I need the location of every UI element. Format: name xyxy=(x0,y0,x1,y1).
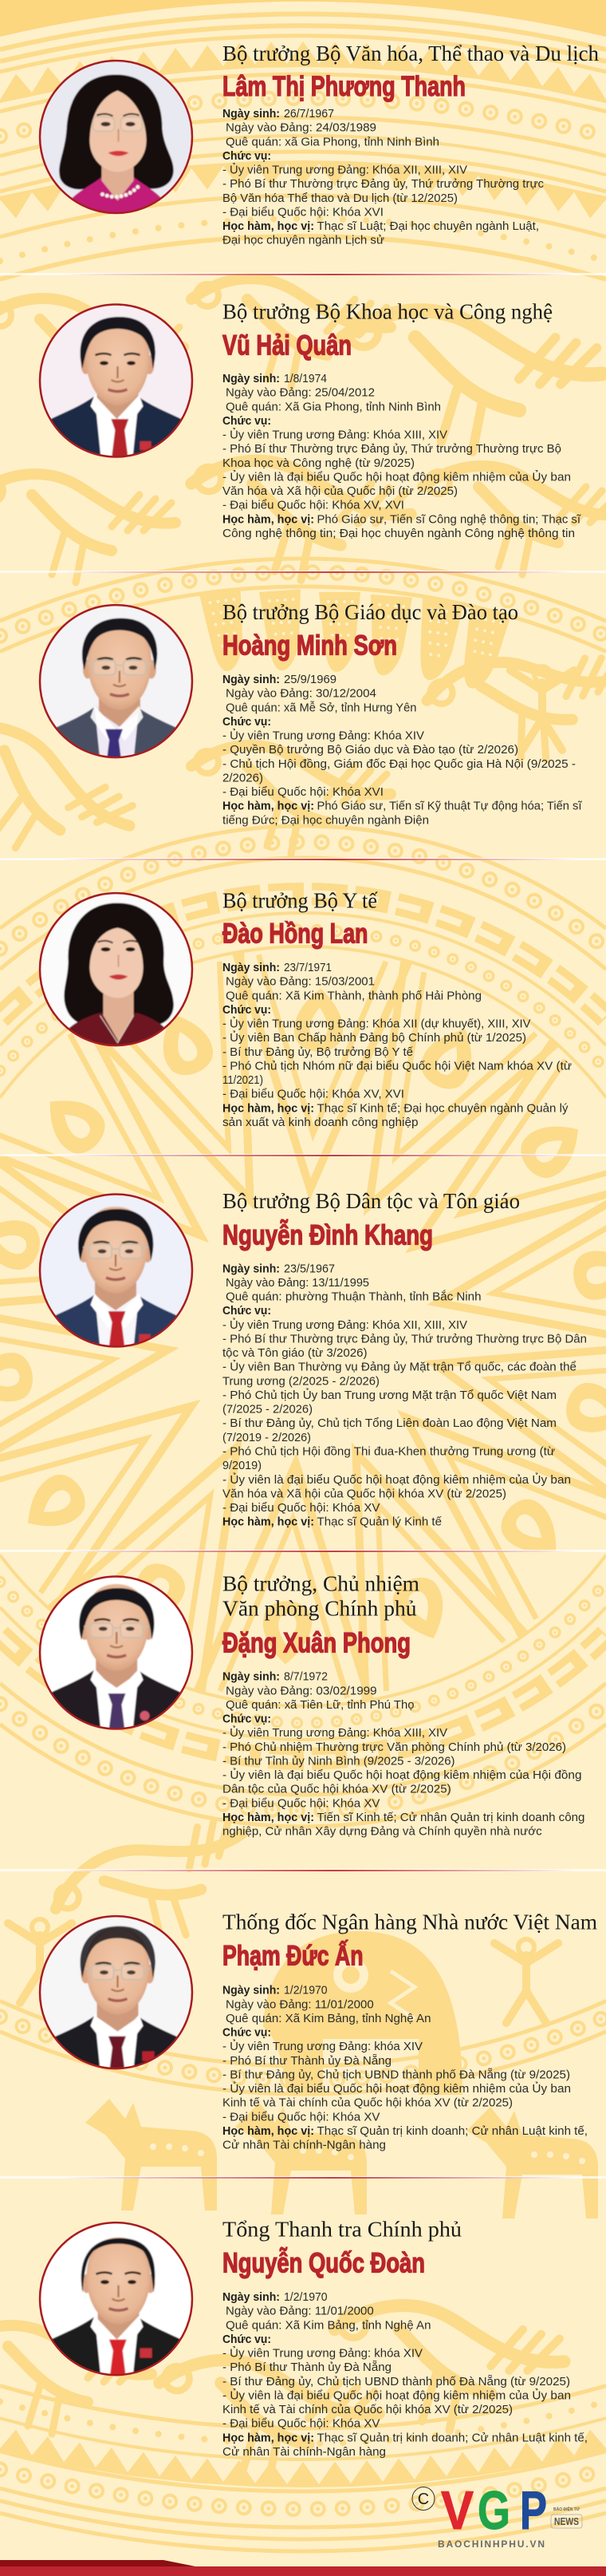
biography text: Ngày vào Đảng: 25/04/2012 xyxy=(226,386,375,400)
portrait xyxy=(37,57,196,217)
name: Đào Hồng Lan xyxy=(222,919,368,950)
biography text: 9/2019) xyxy=(222,1459,262,1472)
biography text: - Ủy viên Trung ương Đảng: Khóa XIII, XIV xyxy=(222,1725,447,1740)
biography text: tiếng Đức; Đại học chuyên ngành Điện xyxy=(222,813,429,827)
biography text: - Phó Bí thư Thành ủy Đà Nẵng xyxy=(222,2054,392,2068)
biography text: Học hàm, học vị: xyxy=(222,1811,314,1824)
biography text: Kinh tế và Tài chính của Quốc hội khóa XV (từ 2/2025) xyxy=(222,2403,513,2416)
biography text: Học hàm, học vị: xyxy=(222,219,314,233)
biography text: - Ủy viên là đại biểu Quốc hội hoạt động kiêm nhiệm của Ủy ban xyxy=(222,1472,571,1487)
biography text: Ngày sinh: xyxy=(222,2290,280,2304)
biography text: Cử nhân Tài chính-Ngân hàng xyxy=(222,2139,386,2152)
biography text: Ngày sinh: xyxy=(222,1262,280,1275)
biography text: Quê quán: phường Thuận Thành, tỉnh Bắc Ninh xyxy=(226,1290,482,1304)
biography text: Trung ương (2/2025 - 2/2026) xyxy=(222,1374,380,1388)
biography text: - Ủy viên Trung ương Đảng: Khóa XIV xyxy=(222,728,424,742)
portrait xyxy=(38,2222,193,2376)
biography text: 23/5/1967 xyxy=(284,1262,335,1275)
biography text: Ngày sinh: xyxy=(222,372,280,385)
biography text xyxy=(222,961,572,1129)
role heading: Bộ trưởng Bộ Dân tộc và Tôn giáo xyxy=(222,1189,520,1213)
name: Vũ Hải Quân xyxy=(222,330,352,361)
biography text: Thạc sĩ Quản trị kinh doanh; Cử nhân Luật kinh tế, xyxy=(317,2431,588,2444)
panel: Lâm Thị Phương Thanh xyxy=(37,41,599,247)
portrait xyxy=(38,1575,193,1730)
biography text: - Ủy viên là đại biểu Quốc hội hoạt động kiêm nhiệm của Ủy ban xyxy=(222,2081,571,2096)
biography text: Học hàm, học vị: xyxy=(222,1101,314,1115)
name: Nguyễn Quốc Đoàn xyxy=(222,2246,425,2278)
name: Phạm Đức Ấn xyxy=(222,1940,364,1972)
portrait xyxy=(38,1193,193,1348)
news badge: BÁO ĐIỆN TỬ xyxy=(553,2506,580,2512)
VGP wordmark: P xyxy=(520,2480,547,2541)
biography text: Văn hóa và Xã hội của Quốc hội khóa XV (từ 2/2025) xyxy=(222,1487,506,1500)
biography text: (7/2025 - 2/2026) xyxy=(222,1403,313,1416)
biography text: Cử nhân Tài chính-Ngân hàng xyxy=(222,2445,386,2459)
biography text: - Bí thư Đảng ủy, Chủ tịch UBND thành phố Đà Nẵng (từ 9/2025) xyxy=(222,2375,570,2388)
portrait xyxy=(38,303,193,458)
biography text: Phó Giáo sư, Tiến sĩ Công nghệ thông tin; Thạc sĩ xyxy=(317,512,581,526)
biography text: sản xuất và kinh doanh công nghiệp xyxy=(222,1116,418,1129)
biography text: - Ủy viên Ban Thường vụ Đảng ủy Mặt trận Tổ quốc, các đoàn thể xyxy=(222,1360,576,1374)
biography text: - Ủy viên là đại biểu Quốc hội hoạt động kiêm nhiệm của Ủy ban xyxy=(222,469,571,484)
biography text xyxy=(222,2290,588,2459)
biography text: Thạc sĩ Kinh tế; Đại học chuyên ngành Quản lý xyxy=(317,1101,569,1115)
role heading: Bộ trưởng Bộ Khoa học và Công nghệ xyxy=(222,299,553,323)
biography text xyxy=(222,1262,587,1529)
panel: Nguyễn Quốc Đoàn xyxy=(37,2217,588,2459)
biography text: 1/2/1970 xyxy=(284,2290,328,2304)
logo: VGP News, baochinhphu.vn xyxy=(412,2480,582,2550)
biography text: Ngày vào Đảng: 15/03/2001 xyxy=(226,975,375,989)
biography text: Ngày vào Đảng: 03/02/1999 xyxy=(226,1684,377,1697)
biography text: - Phó Chủ tịch Ủy ban Trung ương Mặt trận Tổ quốc Việt Nam xyxy=(222,1388,557,1402)
icon: copyright circle xyxy=(412,2487,435,2511)
biography text: Đại học chuyên ngành Lịch sử xyxy=(222,234,384,247)
biography text: Học hàm, học vị: xyxy=(222,1515,314,1529)
biography text: - Đại biểu Quốc hội: Khóa XV, XVI xyxy=(222,1088,404,1101)
biography text: Ngày vào Đảng: 30/12/2004 xyxy=(226,687,376,701)
biography text: - Bí thư Tỉnh ủy Ninh Bình (9/2025 - 3/2026) xyxy=(222,1754,454,1768)
VGP wordmark: V xyxy=(441,2480,474,2541)
biography text: Chức vụ: xyxy=(222,715,271,729)
role heading: Bộ trưởng, Chủ nhiệm xyxy=(222,1571,419,1595)
biography text: Chức vụ: xyxy=(222,149,271,163)
biography text: Ngày vào Đảng: 13/11/1995 xyxy=(226,1276,369,1290)
name: Đặng Xuân Phong xyxy=(222,1628,411,1659)
biography text: - Ủy viên Trung ương Đảng: khóa XIV xyxy=(222,2346,423,2361)
panel: Đặng Xuân Phong xyxy=(37,1571,584,1839)
biography text: Chức vụ: xyxy=(222,1304,271,1318)
VGP wordmark xyxy=(441,2480,547,2541)
biography text: Quê quán: xã Tiên Lữ, tỉnh Phú Thọ xyxy=(226,1698,415,1712)
portrait xyxy=(37,890,196,1049)
biography text: - Ủy viên Trung ương Đảng: Khóa XII, XIII, XIV xyxy=(222,1318,467,1332)
biography text: 25/9/1969 xyxy=(284,673,336,686)
biography text: Quê quán: Xã Gia Phong, tỉnh Ninh Bình xyxy=(226,400,441,413)
biography text: - Phó Chủ nhiệm Thường trực Văn phòng Chính phủ (từ 3/2026) xyxy=(222,1740,566,1754)
biography text: 23/7/1971 xyxy=(284,961,332,974)
biography text: - Phó Bí thư Thành ủy Đà Nẵng xyxy=(222,2361,392,2374)
biography text xyxy=(222,372,581,540)
biography text: Ngày sinh: xyxy=(222,961,280,974)
biography text: Khoa học và Công nghệ (từ 9/2025) xyxy=(222,456,415,470)
biography text: Chức vụ: xyxy=(222,2333,271,2346)
role heading: Bộ trưởng Bộ Giáo dục và Đào tạo xyxy=(222,600,518,624)
biography text: Tiến sĩ Kinh tế; Cử nhân Quản trị kinh doanh công xyxy=(317,1811,584,1824)
role heading: Văn phòng Chính phủ xyxy=(222,1596,417,1620)
biography text: 1/2/1970 xyxy=(284,1984,328,1997)
portrait xyxy=(38,603,193,758)
role heading: Thống đốc Ngân hàng Nhà nước Việt Nam xyxy=(222,1910,597,1934)
biography text: Dân tộc của Quốc hội khóa XV (từ 2/2025) xyxy=(222,1783,451,1796)
biography text: nghiệp, Cử nhân Xây dựng Đảng và Chính quyền nhà nước xyxy=(222,1825,542,1839)
biography text: - Đại biểu Quốc hội: Khóa XV xyxy=(222,1501,380,1515)
VGP wordmark: G xyxy=(478,2480,510,2541)
biography text: - Đại biểu Quốc hội: Khóa XV xyxy=(222,2417,380,2431)
panel: Hoàng Minh Sơn xyxy=(37,600,582,827)
panel: Phạm Đức Ấn xyxy=(37,1910,597,2152)
biography text: - Đại biểu Quốc hội: Khóa XVI xyxy=(222,205,384,219)
biography text: - Ủy viên là đại biểu Quốc hội hoạt động kiêm nhiệm của Hội đồng xyxy=(222,1768,582,1782)
biography text: 2/2026) xyxy=(222,771,263,784)
biography text: Chức vụ: xyxy=(222,1003,271,1017)
panel: Vũ Hải Quân xyxy=(37,299,581,540)
name: Hoàng Minh Sơn xyxy=(222,630,397,662)
icon: copyright circle: C xyxy=(418,2491,429,2508)
biography text: Chức vụ: xyxy=(222,414,271,428)
biography text xyxy=(222,1670,584,1839)
panel: Nguyễn Đình Khang xyxy=(37,1189,587,1529)
panel: Đào Hồng Lan xyxy=(37,888,572,1129)
biography text: - Bí thư Đảng ủy, Chủ tịch UBND thành phố Đà Nẵng (từ 9/2025) xyxy=(222,2068,570,2081)
biography text: - Bí thư Đảng ủy, Bộ trưởng Bộ Y tế xyxy=(222,1045,414,1059)
biography text: Quê quán: Xã Kim Bảng, tỉnh Nghệ An xyxy=(226,2318,431,2332)
news badge: NEWS xyxy=(554,2515,579,2527)
biography text: - Ủy viên Trung ương Đảng: Khóa XII (dự khuyết), XIII, XIV xyxy=(222,1017,531,1031)
news badge xyxy=(551,2506,582,2528)
biography text: (7/2019 - 2/2026) xyxy=(222,1431,311,1444)
biography text: Học hàm, học vị: xyxy=(222,800,314,813)
biography text: - Ủy viên Trung ương Đảng: Khóa XIII, XIV xyxy=(222,428,447,442)
biography text: 8/7/1972 xyxy=(284,1670,328,1684)
biography text: Quê quán: Xã Kim Bảng, tỉnh Nghệ An xyxy=(226,2012,431,2025)
biography text: - Chủ tịch Hội đồng, Giám đốc Đại học Quốc gia Hà Nội (9/2025 - xyxy=(222,757,576,771)
biography text: Phó Giáo sư, Tiến sĩ Kỹ thuật Tự động hóa; Tiến sĩ xyxy=(317,800,582,813)
biography text: Thạc sĩ Quản lý Kinh tế xyxy=(317,1515,443,1529)
biography text: 26/7/1967 xyxy=(284,107,334,121)
biography text: - Ủy viên Trung ương Đảng: khóa XIV xyxy=(222,2039,423,2053)
biography text: 11/2021) xyxy=(222,1073,263,1087)
biography text: - Ủy viên Trung ương Đảng: Khóa XII, XIII, XIV xyxy=(222,163,467,177)
biography text: - Phó Bí thư Thường trực Đảng ủy, Thứ trưởng Thường trực Bộ Dân xyxy=(222,1333,587,1346)
biography text: Ngày sinh: xyxy=(222,1984,280,1997)
biography text: Chức vụ: xyxy=(222,1713,271,1726)
biography text: Bộ Văn hóa Thể thao và Du lịch (từ 12/2025) xyxy=(222,192,458,205)
biography text: Thạc sĩ Luật; Đại học chuyên ngành Luật, xyxy=(317,219,539,233)
biography text: Học hàm, học vị: xyxy=(222,2124,314,2138)
biography text: Công nghệ thông tin; Đại học chuyên ngành Công nghệ thông tin xyxy=(222,527,575,540)
biography text: Ngày sinh: xyxy=(222,107,280,121)
biography text: Ngày sinh: xyxy=(222,1670,280,1684)
portrait xyxy=(38,1915,193,2070)
biography text: - Phó Bí thư Thường trực Đảng ủy, Thứ trưởng Thường trực xyxy=(222,177,544,191)
biography text xyxy=(222,673,582,827)
biography text: Ngày sinh: xyxy=(222,673,280,686)
site name: BAOCHINHPHU.VN xyxy=(438,2538,545,2550)
role heading: Tổng Thanh tra Chính phủ xyxy=(222,2217,462,2241)
biography text: - Ủy viên là đại biểu Quốc hội hoạt động kiêm nhiệm của Ủy ban xyxy=(222,2388,571,2402)
biography text: Ngày vào Đảng: 24/03/1989 xyxy=(226,121,376,135)
name: Lâm Thị Phương Thanh xyxy=(222,71,466,102)
biography text: Quê quán: xã Mễ Sở, tỉnh Hưng Yên xyxy=(226,701,416,714)
biography text: Ngày vào Đảng: 11/01/2000 xyxy=(226,1997,374,2011)
biography text: - Phó Chủ tịch Nhóm nữ đại biểu Quốc hội Việt Nam khóa XV (từ xyxy=(222,1059,572,1073)
biography text: Ngày vào Đảng: 11/01/2000 xyxy=(226,2305,374,2318)
role heading: Bộ trưởng Bộ Y tế xyxy=(222,888,378,912)
biography text: 1/8/1974 xyxy=(284,372,327,385)
biography text: Thạc sĩ Quản trị kinh doanh; Cử nhân Luật kinh tế, xyxy=(317,2124,588,2138)
biography text: - Ủy viên Ban Chấp hành Đảng bộ Chính phủ (từ 1/2025) xyxy=(222,1030,526,1045)
biography text: - Đại biểu Quốc hội: Khóa XVI xyxy=(222,785,384,799)
biography text: Kinh tế và Tài chính của Quốc hội khóa XV (từ 2/2025) xyxy=(222,2096,513,2110)
biography text: - Phó Chủ tịch Hội đồng Thi đua-Khen thưởng Trung ương (từ xyxy=(222,1445,555,1459)
biography text: - Đại biểu Quốc hội: Khóa XV xyxy=(222,1796,380,1810)
biography text: - Bí thư Đảng ủy, Chủ tịch Tổng Liên đoàn Lao động Việt Nam xyxy=(222,1416,557,1430)
name: Nguyễn Đình Khang xyxy=(222,1219,433,1250)
biography text: tộc và Tôn giáo (từ 3/2026) xyxy=(222,1346,368,1360)
biography text xyxy=(222,1984,588,2152)
biography text: - Đại biểu Quốc hội: Khóa XV, XVI xyxy=(222,499,404,512)
biography text: - Quyền Bộ trưởng Bộ Giáo dục và Đào tạo (từ 2/2026) xyxy=(222,743,518,757)
biography text: Quê quán: Xã Kim Thành, thành phố Hải Phòng xyxy=(226,989,482,1002)
biography text xyxy=(222,107,544,247)
biography text: - Đại biểu Quốc hội: Khóa XV xyxy=(222,2110,380,2124)
biography text: Học hàm, học vị: xyxy=(222,2431,314,2444)
biography text: Văn hóa và Xã hội của Quốc hội (từ 2/2025) xyxy=(222,484,458,498)
biography text: Học hàm, học vị: xyxy=(222,512,314,526)
bottom red bar xyxy=(0,2560,606,2576)
biography text: Quê quán: xã Gia Phong, tỉnh Ninh Bình xyxy=(226,135,439,148)
role heading: Bộ trưởng Bộ Văn hóa, Thể thao và Du lịch xyxy=(222,41,599,65)
role heading xyxy=(222,1571,419,1620)
biography text: Chức vụ: xyxy=(222,2026,271,2040)
biography text: - Phó Bí thư Thường trực Đảng ủy, Thứ trưởng Thường trực Bộ xyxy=(222,442,561,456)
